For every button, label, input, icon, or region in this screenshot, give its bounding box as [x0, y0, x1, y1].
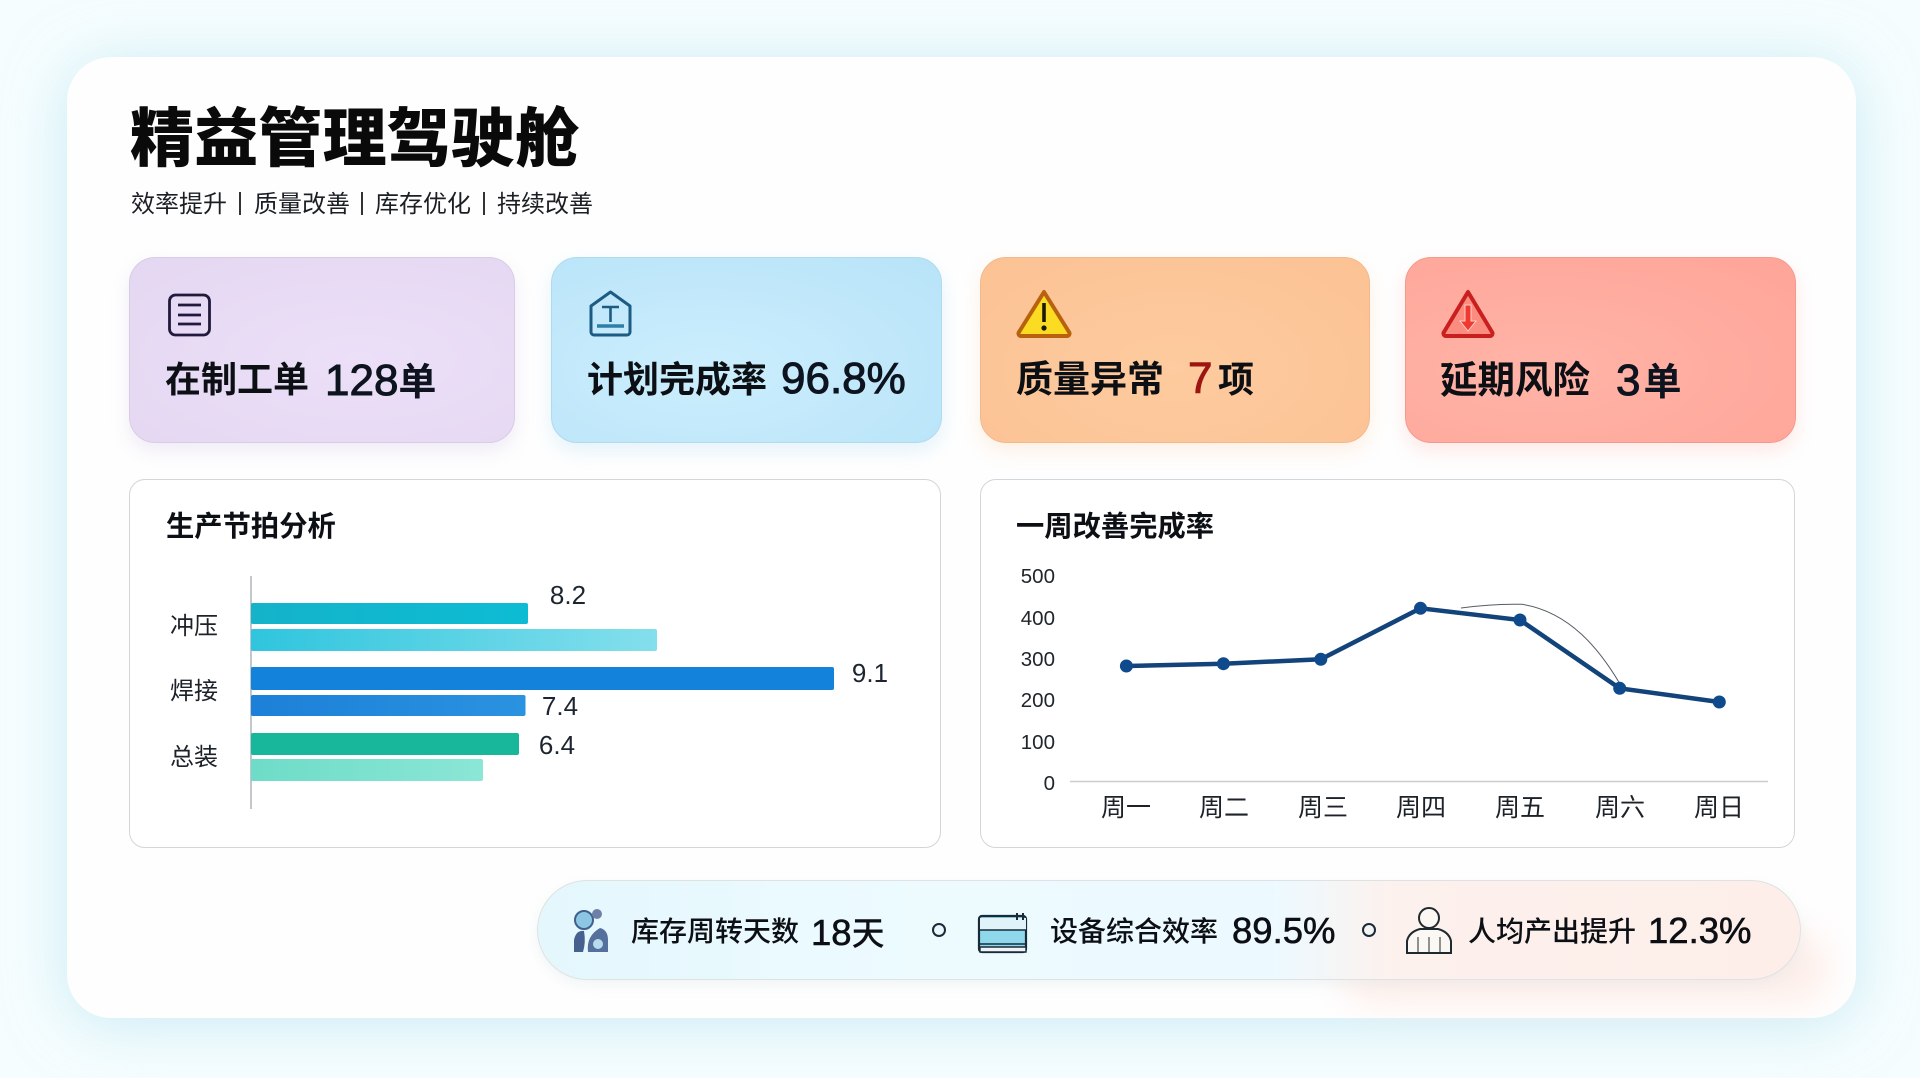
title: 精益管理驾驶舱 [130, 103, 579, 175]
subtitle: 质量改善 [254, 191, 350, 218]
metric label: equipment efficiency: 设备综合效率 [1050, 916, 1218, 947]
bar chart: production takt: 6.4 [539, 730, 575, 760]
KPI value: quality issues: 7 [1188, 354, 1212, 403]
bar chart: production takt: 9.1 [852, 658, 888, 688]
metric value: inventory turnover: 18天 [811, 907, 885, 955]
metric value: equipment efficiency: 89.5% [1232, 910, 1336, 951]
bar chart: production takt: 8.2 [550, 580, 586, 610]
bar chart: production takt: 焊接 [170, 678, 218, 705]
line chart: weekly improvement: 0 [1044, 772, 1055, 795]
KPI label: delay risk: 延期风险 [1440, 359, 1590, 401]
bar chart: production takt: 总装 [170, 744, 218, 771]
subtitle: 持续改善 [497, 191, 593, 218]
panel: weekly improvement chart [980, 479, 1795, 848]
KPI value: plan completion: 96.8% [781, 354, 906, 403]
panel: production takt chart [129, 479, 941, 848]
subtitle: 库存优化 [375, 191, 471, 218]
peach glow under pill [1340, 930, 1830, 1005]
KPI label: quality issues: 质量异常 [1016, 359, 1164, 400]
line chart: weekly improvement: 周五 [1495, 794, 1545, 822]
panel: bottom metrics pill [537, 880, 1801, 980]
line chart: weekly improvement [1021, 565, 1768, 822]
bar chart: production takt: 冲压 [170, 613, 218, 640]
panel: KPI work orders [129, 257, 515, 443]
heading: production takt: 生产节拍分析 [166, 510, 336, 542]
line chart: weekly improvement: 周二 [1199, 794, 1249, 822]
KPI label: work orders: 在制工单 [165, 359, 309, 400]
line chart: weekly improvement: 100 [1021, 731, 1055, 754]
line chart: weekly improvement: 500 [1021, 565, 1055, 588]
KPI unit: quality issues: 项 [1218, 359, 1254, 400]
icon: list document [168, 294, 211, 336]
line chart: weekly improvement: 周四 [1396, 794, 1446, 822]
panel: KPI plan completion [551, 257, 942, 443]
line chart: weekly improvement: 400 [1021, 607, 1055, 630]
line chart: weekly improvement: 周一 [1101, 794, 1151, 822]
line chart: weekly improvement: 300 [1021, 648, 1055, 671]
metric label: inventory turnover: 库存周转天数 [631, 916, 799, 947]
KPI value: work orders: 128单 [325, 351, 436, 406]
bar chart: production takt: 7.4 [542, 691, 578, 721]
metric value: output per person: 12.3% [1648, 910, 1752, 951]
icon: equipment window [978, 913, 1028, 954]
icon: tagged house [590, 290, 632, 336]
line chart: weekly improvement: 200 [1021, 689, 1055, 712]
panel: KPI delay risk [1405, 257, 1796, 443]
line chart: weekly improvement: 周三 [1298, 794, 1348, 822]
KPI label: plan completion: 计划完成率 [587, 359, 767, 400]
panel: KPI quality issues [980, 257, 1370, 443]
metric label: output per person: 人均产出提升 [1468, 916, 1636, 947]
icon: person outline [1406, 907, 1452, 954]
subtitle: 效率提升 [131, 191, 227, 218]
icon: risk triangle with arrow [1442, 290, 1494, 338]
line chart: weekly improvement: 周日 [1694, 794, 1744, 822]
bar chart: production takt [170, 576, 888, 809]
heading: weekly improvement: 一周改善完成率 [1016, 510, 1214, 542]
line chart: weekly improvement: 周六 [1595, 794, 1645, 822]
icon: warning triangle [1016, 290, 1072, 338]
icon: inventory people [574, 909, 608, 952]
KPI value: delay risk: 3单 [1616, 351, 1682, 406]
separator dot [932, 923, 946, 937]
separator dot [1362, 923, 1376, 937]
subtitle [131, 191, 593, 218]
